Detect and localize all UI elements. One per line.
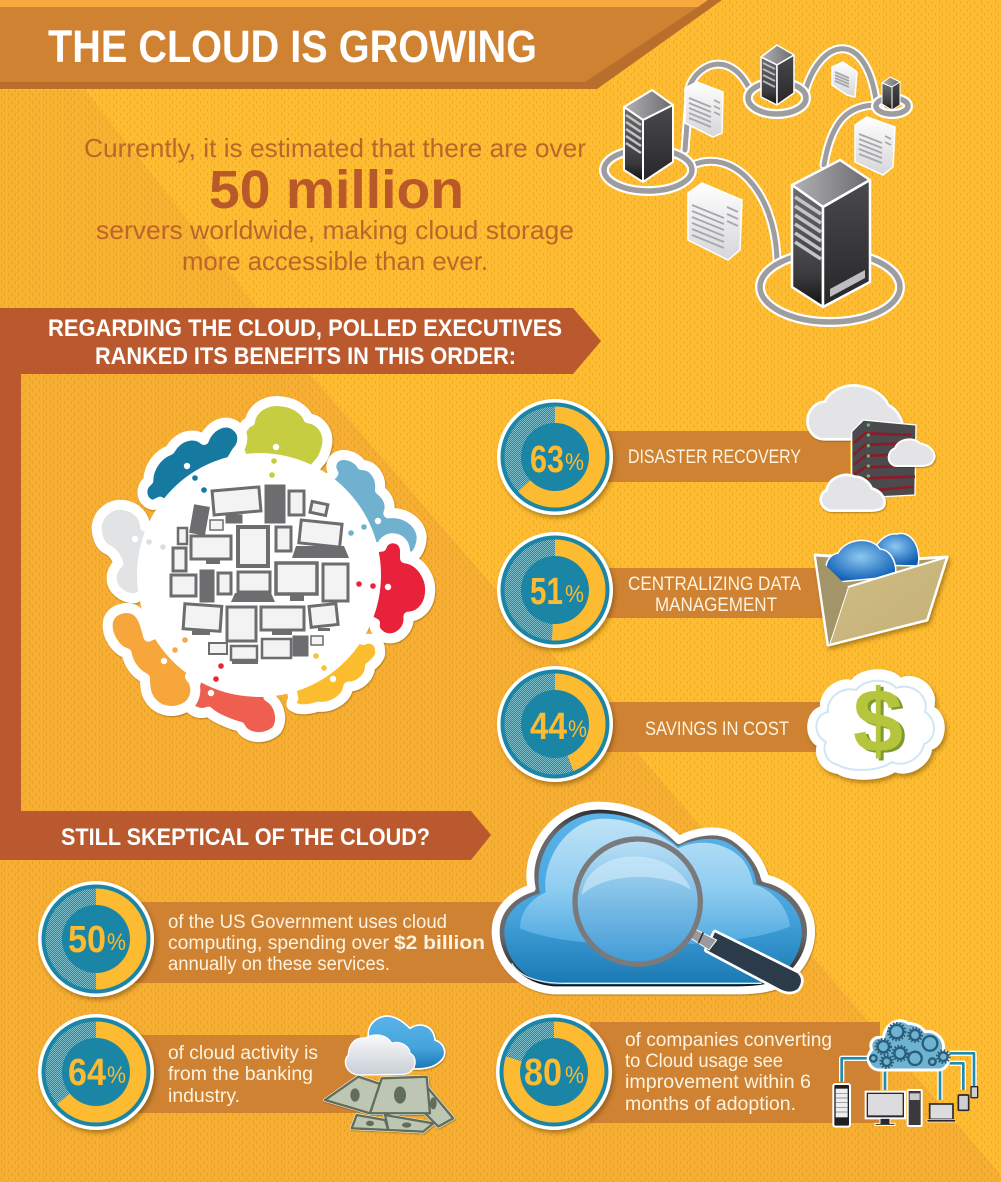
- stat text: [168, 912, 485, 975]
- stat text: to Cloud usage see: [625, 1051, 783, 1072]
- stat bar: US government: [130, 902, 520, 983]
- donut: 64%: [38, 1014, 154, 1130]
- stat text: [625, 1030, 832, 1115]
- section banner: benefits: [0, 308, 601, 814]
- rings: [604, 82, 908, 322]
- intro text: Currently, it is estimated that there are over: [84, 133, 586, 163]
- stat text: computing, spending over: [168, 933, 390, 954]
- clouds: [363, 1016, 445, 1069]
- donut: 63%: 63: [530, 439, 564, 481]
- banner heading: REGARDING THE CLOUD, POLLED EXECUTIVES: [48, 315, 562, 342]
- banner heading: STILL SKEPTICAL OF THE CLOUD?: [61, 824, 430, 851]
- stat bar: companies: [590, 1022, 880, 1123]
- devices: [833, 1084, 978, 1127]
- server: top: [761, 45, 794, 105]
- intro text: 50 million: [209, 160, 464, 220]
- gear cloud: [868, 1021, 949, 1070]
- donut: 50%: [38, 881, 154, 997]
- server: small: [882, 77, 900, 110]
- stat text: of cloud activity is: [168, 1043, 318, 1064]
- icon: clouds and money: [325, 1016, 453, 1132]
- stat text: from the banking: [168, 1064, 313, 1085]
- label: MANAGEMENT: [655, 595, 777, 616]
- donut: 63%: [497, 399, 613, 515]
- server: large: [792, 160, 870, 307]
- label: [628, 574, 801, 616]
- colored clouds: [97, 401, 430, 737]
- icon: dollar cloud: [809, 671, 943, 778]
- donut: 44%: %: [568, 716, 587, 743]
- benefit bar: savings in cost: [600, 702, 840, 752]
- donut: 51%: %: [565, 581, 584, 608]
- icon: clouds and server rack: [807, 385, 935, 511]
- stat text: of companies converting: [625, 1030, 832, 1051]
- donut: 64%: %: [107, 1062, 126, 1089]
- documents: [685, 62, 895, 260]
- donut: 80%: [496, 1014, 612, 1130]
- benefit bar: disaster recovery: [600, 431, 850, 482]
- donut: 51%: [497, 532, 613, 648]
- title banner: [0, 0, 722, 89]
- donut: 50%: 50: [68, 919, 106, 961]
- donut: 64%: 64: [68, 1052, 106, 1094]
- intro text: more accessible than ever.: [182, 246, 488, 276]
- connectors: [842, 1053, 974, 1100]
- icon: folder with clouds: [815, 533, 947, 645]
- stat text: annually on these services.: [168, 954, 390, 975]
- section banner: skeptical: [0, 811, 491, 860]
- intro text: [84, 133, 586, 276]
- stat text: $2 billion: [394, 933, 485, 954]
- donut: 44%: [497, 666, 613, 782]
- stat text: industry.: [168, 1086, 240, 1107]
- stat text: [168, 1043, 318, 1107]
- donut: 50%: %: [107, 929, 126, 956]
- icon: cloud with magnifying glass: [496, 806, 811, 992]
- label: SAVINGS IN COST: [645, 719, 789, 740]
- stat text: months of adoption.: [625, 1094, 796, 1115]
- intro text: servers worldwide, making cloud storage: [96, 215, 574, 245]
- label: CENTRALIZING DATA: [628, 574, 801, 595]
- banner heading: RANKED ITS BENEFITS IN THIS ORDER:: [95, 343, 516, 370]
- benefit bar: centralizing data: [600, 568, 840, 618]
- stat text: of the US Government uses cloud: [168, 912, 447, 933]
- donut: 80%: 80: [524, 1052, 562, 1094]
- cables: [685, 49, 880, 260]
- server: left: [624, 90, 673, 182]
- illustration: connected servers: [604, 45, 908, 322]
- stat bar: banking: [130, 1035, 360, 1113]
- device sphere: [171, 486, 349, 664]
- donut: 63%: %: [565, 449, 584, 476]
- banknotes: [325, 1077, 453, 1132]
- cloud globe: [97, 401, 430, 737]
- icon: dollar cloud: $: [853, 672, 903, 772]
- donut: 80%: %: [565, 1062, 584, 1089]
- magnifying glass: [575, 839, 801, 992]
- donut: 51%: 51: [530, 571, 563, 613]
- donut: 44%: 44: [530, 706, 567, 748]
- connector dots: [132, 444, 391, 696]
- icon: gear cloud and devices: [833, 1021, 978, 1127]
- label: DISASTER RECOVERY: [628, 447, 801, 468]
- banner heading: [48, 315, 562, 370]
- stat text: improvement within 6: [625, 1072, 811, 1093]
- title: THE CLOUD IS GROWING: [48, 21, 537, 72]
- dollar sign: $: [856, 674, 906, 774]
- white disk: [137, 453, 381, 697]
